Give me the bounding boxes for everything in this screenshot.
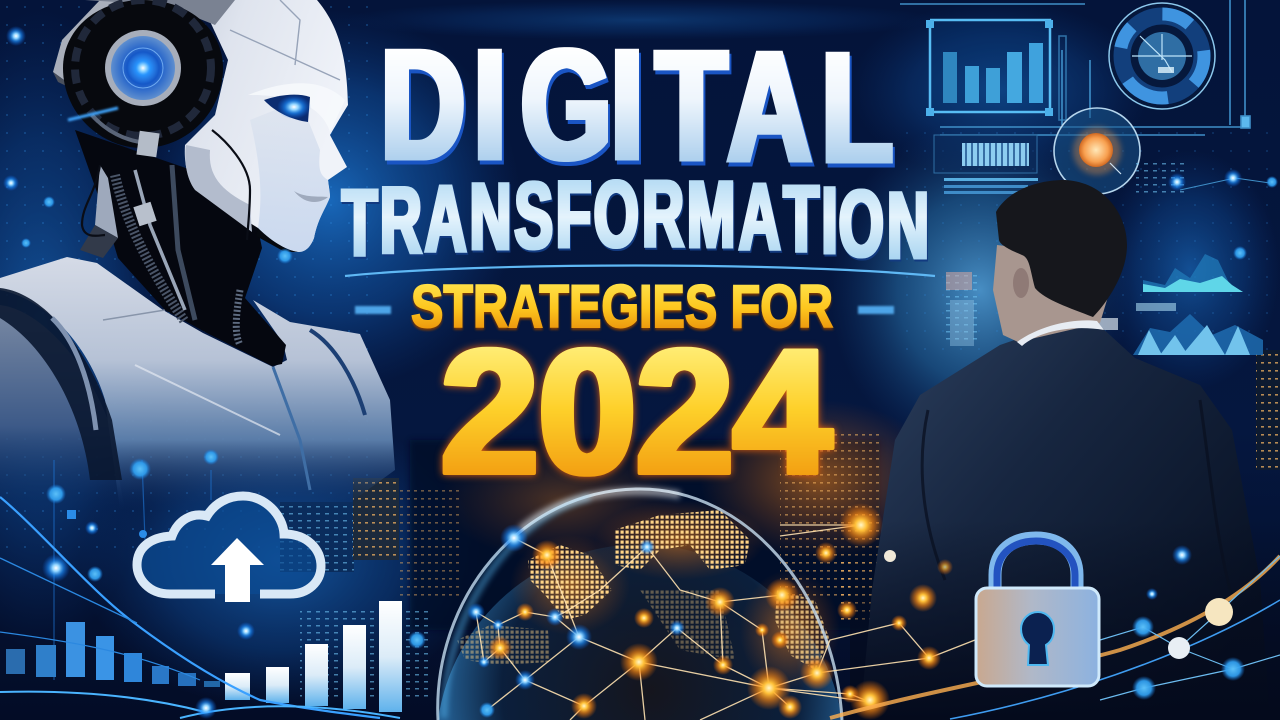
cloud outline bbox=[137, 496, 321, 594]
upload arrow bbox=[211, 538, 264, 602]
hair bbox=[996, 180, 1127, 317]
top-right HUD panels bbox=[900, 0, 1278, 355]
shoulder joint bands bbox=[0, 288, 122, 480]
suit sleeve seam bbox=[922, 400, 1230, 590]
divider dashes bbox=[355, 306, 894, 314]
robot torso armor bbox=[0, 257, 395, 510]
padlock keyhole bbox=[1021, 612, 1054, 665]
right-side light streaks and nodes bbox=[830, 545, 1280, 719]
barcode panel bbox=[934, 135, 1038, 194]
black ear ring bbox=[63, 0, 223, 148]
night city skyline bbox=[280, 275, 1280, 700]
businessman seen from behind bbox=[850, 180, 1280, 720]
radial gauge bbox=[1109, 3, 1215, 109]
blue glowing ear lens bbox=[105, 30, 181, 106]
decorative arc divider bbox=[345, 266, 935, 276]
orange network nodes bbox=[488, 503, 953, 720]
network lines bbox=[476, 525, 975, 720]
icon: padlock bbox=[976, 538, 1099, 686]
left-side blue particles and lines bbox=[3, 26, 426, 680]
robot left arm bbox=[0, 305, 125, 510]
robot figure bbox=[0, 0, 395, 510]
shirt collar bbox=[1017, 320, 1104, 346]
year: 2024: 2024 bbox=[441, 312, 831, 511]
wave area chart bbox=[1143, 254, 1243, 292]
neck clamp bbox=[136, 131, 160, 157]
ear flare bbox=[68, 108, 118, 120]
map dots bbox=[457, 510, 830, 670]
suit lower fade bbox=[850, 520, 1280, 720]
padlock body bbox=[976, 588, 1099, 686]
neck and ear bbox=[993, 245, 1110, 342]
title: DIGITAL: DIGITAL bbox=[381, 17, 893, 196]
data nodes grid bbox=[1136, 162, 1278, 260]
magnified orange data circle bbox=[1054, 108, 1140, 194]
robot head shell and face bbox=[85, 0, 348, 252]
helmet side shell bbox=[53, 0, 150, 88]
robot eye bbox=[264, 95, 311, 122]
chart frame with bars bbox=[926, 20, 1053, 116]
mountain area chart bbox=[1133, 303, 1263, 355]
blue light trails bbox=[0, 497, 400, 719]
globe with network bbox=[438, 489, 975, 720]
padlock shackle bbox=[995, 538, 1077, 595]
title: TRANSFORMATION: TRANSFORMATION bbox=[342, 161, 929, 279]
globe rim bbox=[438, 489, 842, 720]
white and blue network nodes bbox=[467, 524, 896, 718]
circuit frame lines bbox=[900, 0, 1250, 135]
title bbox=[342, 17, 935, 511]
bar chart: fading blue bars bbox=[6, 622, 220, 687]
suit jacket bbox=[860, 326, 1270, 720]
pale distant towers bbox=[946, 272, 1118, 346]
bar chart: rising white bars bbox=[225, 601, 402, 712]
mechanical neck bbox=[75, 130, 286, 366]
subtitle: STRATEGIES FOR: STRATEGIES FOR bbox=[411, 273, 833, 340]
icon: cloud upload bbox=[137, 496, 321, 602]
ear wire bbox=[82, 130, 250, 240]
